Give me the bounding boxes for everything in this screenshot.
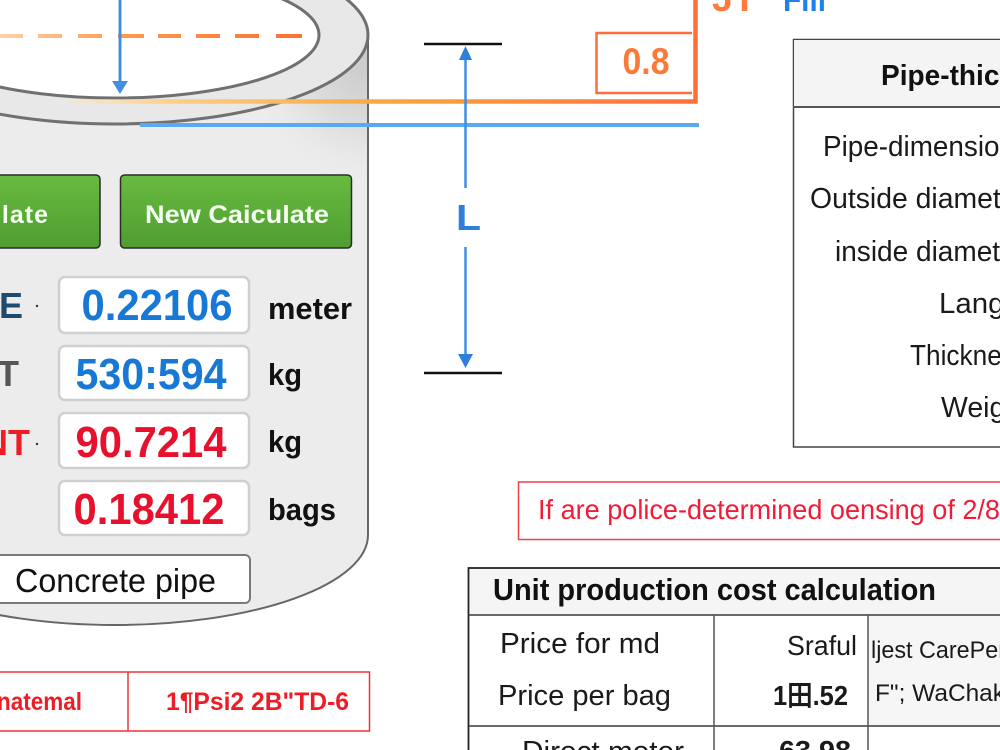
cost table rows: 1田.52 [773, 680, 848, 711]
length dimension marker: L [456, 197, 481, 238]
cost table rows: Price per bag [498, 680, 671, 712]
button: calculate: late [2, 201, 49, 229]
result row: volume: 0.22106 [82, 281, 232, 330]
orange thickness leader line [70, 0, 696, 102]
result row: weight [0, 346, 302, 400]
inner diameter arrow [112, 0, 128, 94]
pipe inner opening [0, 0, 319, 98]
table: material grade [0, 672, 370, 731]
length dimension marker [424, 44, 502, 373]
label: concrete pipe [0, 555, 250, 603]
panel: pipe cylinder [0, 0, 368, 625]
result row: weight: kg [268, 357, 302, 392]
label: concrete pipe: Concrete pipe [15, 562, 216, 599]
wall shading [240, 30, 367, 190]
result row: cement: kg [268, 424, 302, 459]
cost table heading: Unit production cost calculation [493, 572, 936, 607]
dashed diameter line [0, 34, 302, 38]
cost table rows: F"; WaChak [875, 680, 1000, 707]
cost table rows [498, 628, 1000, 750]
table row labels [810, 131, 1000, 424]
result row: bags [59, 481, 336, 535]
result row: volume [0, 277, 352, 333]
result row: weight: 530:594 [76, 350, 227, 399]
cost table rows: Price for md [500, 628, 660, 660]
table: pipe thickness [793, 40, 1000, 447]
table: unit production cost [468, 568, 1000, 750]
result row: cement [0, 413, 302, 468]
result row: bags: bags [268, 492, 336, 527]
button: new calculate: New Caiculate [145, 201, 329, 229]
result row: bags: 0.18412 [74, 485, 224, 534]
button: calculate [0, 175, 100, 248]
pipe top ring [0, 0, 368, 124]
callout: density note [518, 482, 1000, 540]
button: new calculate [120, 175, 352, 248]
cost table rows: Sraful [787, 630, 857, 661]
blue leader line [140, 123, 699, 127]
table: material grade: 1¶Psi2 2B"TD-6 [166, 688, 349, 716]
thickness value box: 0.8 [622, 41, 670, 82]
result row: cement: 90.7214 [76, 418, 227, 467]
thickness value box [596, 33, 692, 93]
cropped top labels [712, 0, 826, 19]
result row: volume: meter [268, 291, 352, 326]
pipe wall [0, 35, 368, 625]
